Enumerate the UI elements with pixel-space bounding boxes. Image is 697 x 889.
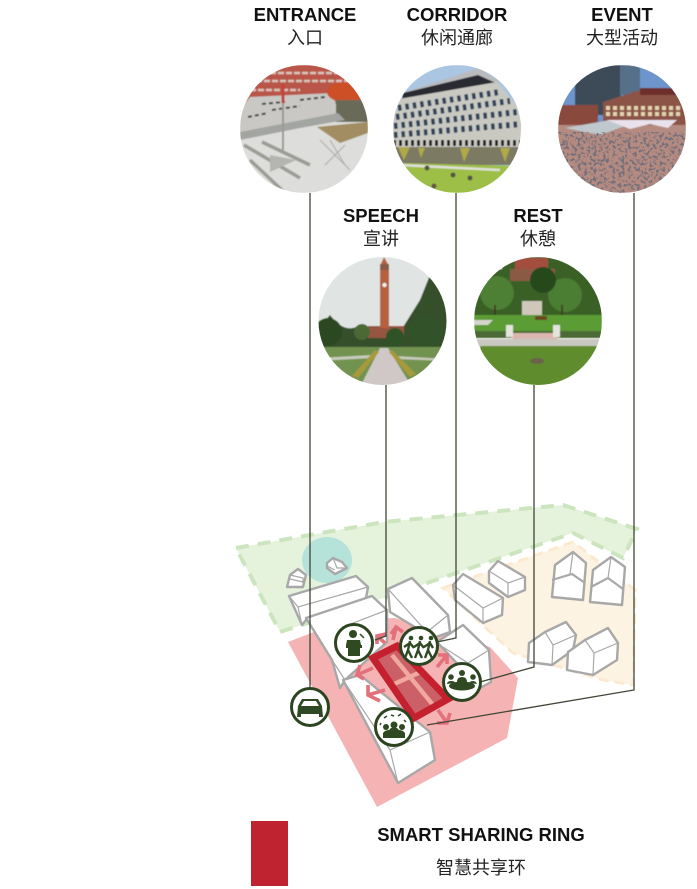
leader line: speech: [375, 385, 386, 640]
heading: event: [586, 4, 658, 48]
photo: clock tower: [314, 257, 448, 387]
heading: speech: SPEECH: [343, 205, 419, 226]
leader line: event: [427, 193, 634, 725]
site plan: [236, 505, 637, 807]
legend label: SMART SHARING RING: [377, 824, 585, 845]
photo: entrance plaza: [240, 65, 370, 193]
legend swatch: [251, 821, 288, 886]
legend label: [377, 824, 585, 878]
icon: meeting table: [444, 664, 480, 700]
heading: corridor: 休闲通廊: [421, 28, 493, 48]
leader line: corridor: [437, 193, 456, 642]
houses: [453, 552, 625, 675]
teal entrance highlight: [302, 537, 352, 583]
icon: walking people: [400, 628, 438, 664]
icon: crowd event: [376, 708, 412, 746]
legend: [251, 821, 585, 886]
heading: entrance: 入口: [287, 28, 323, 48]
photo: event crowd: [558, 65, 686, 193]
heading: entrance: ENTRANCE: [254, 4, 356, 25]
legend label: 智慧共享环: [436, 858, 526, 878]
ring arrows: [357, 627, 450, 723]
icon: speech podium: [336, 624, 372, 662]
heading: entrance: [254, 4, 356, 48]
heading: event: EVENT: [591, 4, 654, 25]
heading: rest: [513, 205, 563, 249]
heading: rest: REST: [513, 205, 563, 226]
photo: corridor building: [393, 65, 522, 193]
photo: lawn: [474, 257, 602, 387]
central buildings: [289, 576, 491, 783]
heading: corridor: [407, 4, 507, 48]
leader line: entrance: [309, 193, 311, 690]
small entrance buildings: [287, 558, 347, 587]
smart sharing ring: [357, 627, 450, 723]
orange rest zone: [443, 542, 635, 685]
heading: rest: 休憩: [520, 229, 556, 249]
leader line: rest: [480, 385, 534, 682]
heading: corridor: CORRIDOR: [407, 4, 507, 25]
heading: event: 大型活动: [586, 28, 658, 48]
heading: speech: 宣讲: [363, 229, 399, 249]
icon: car: [292, 688, 328, 726]
green park zone: [236, 505, 637, 632]
pink ring zone: [288, 618, 518, 807]
heading: speech: [343, 205, 419, 249]
